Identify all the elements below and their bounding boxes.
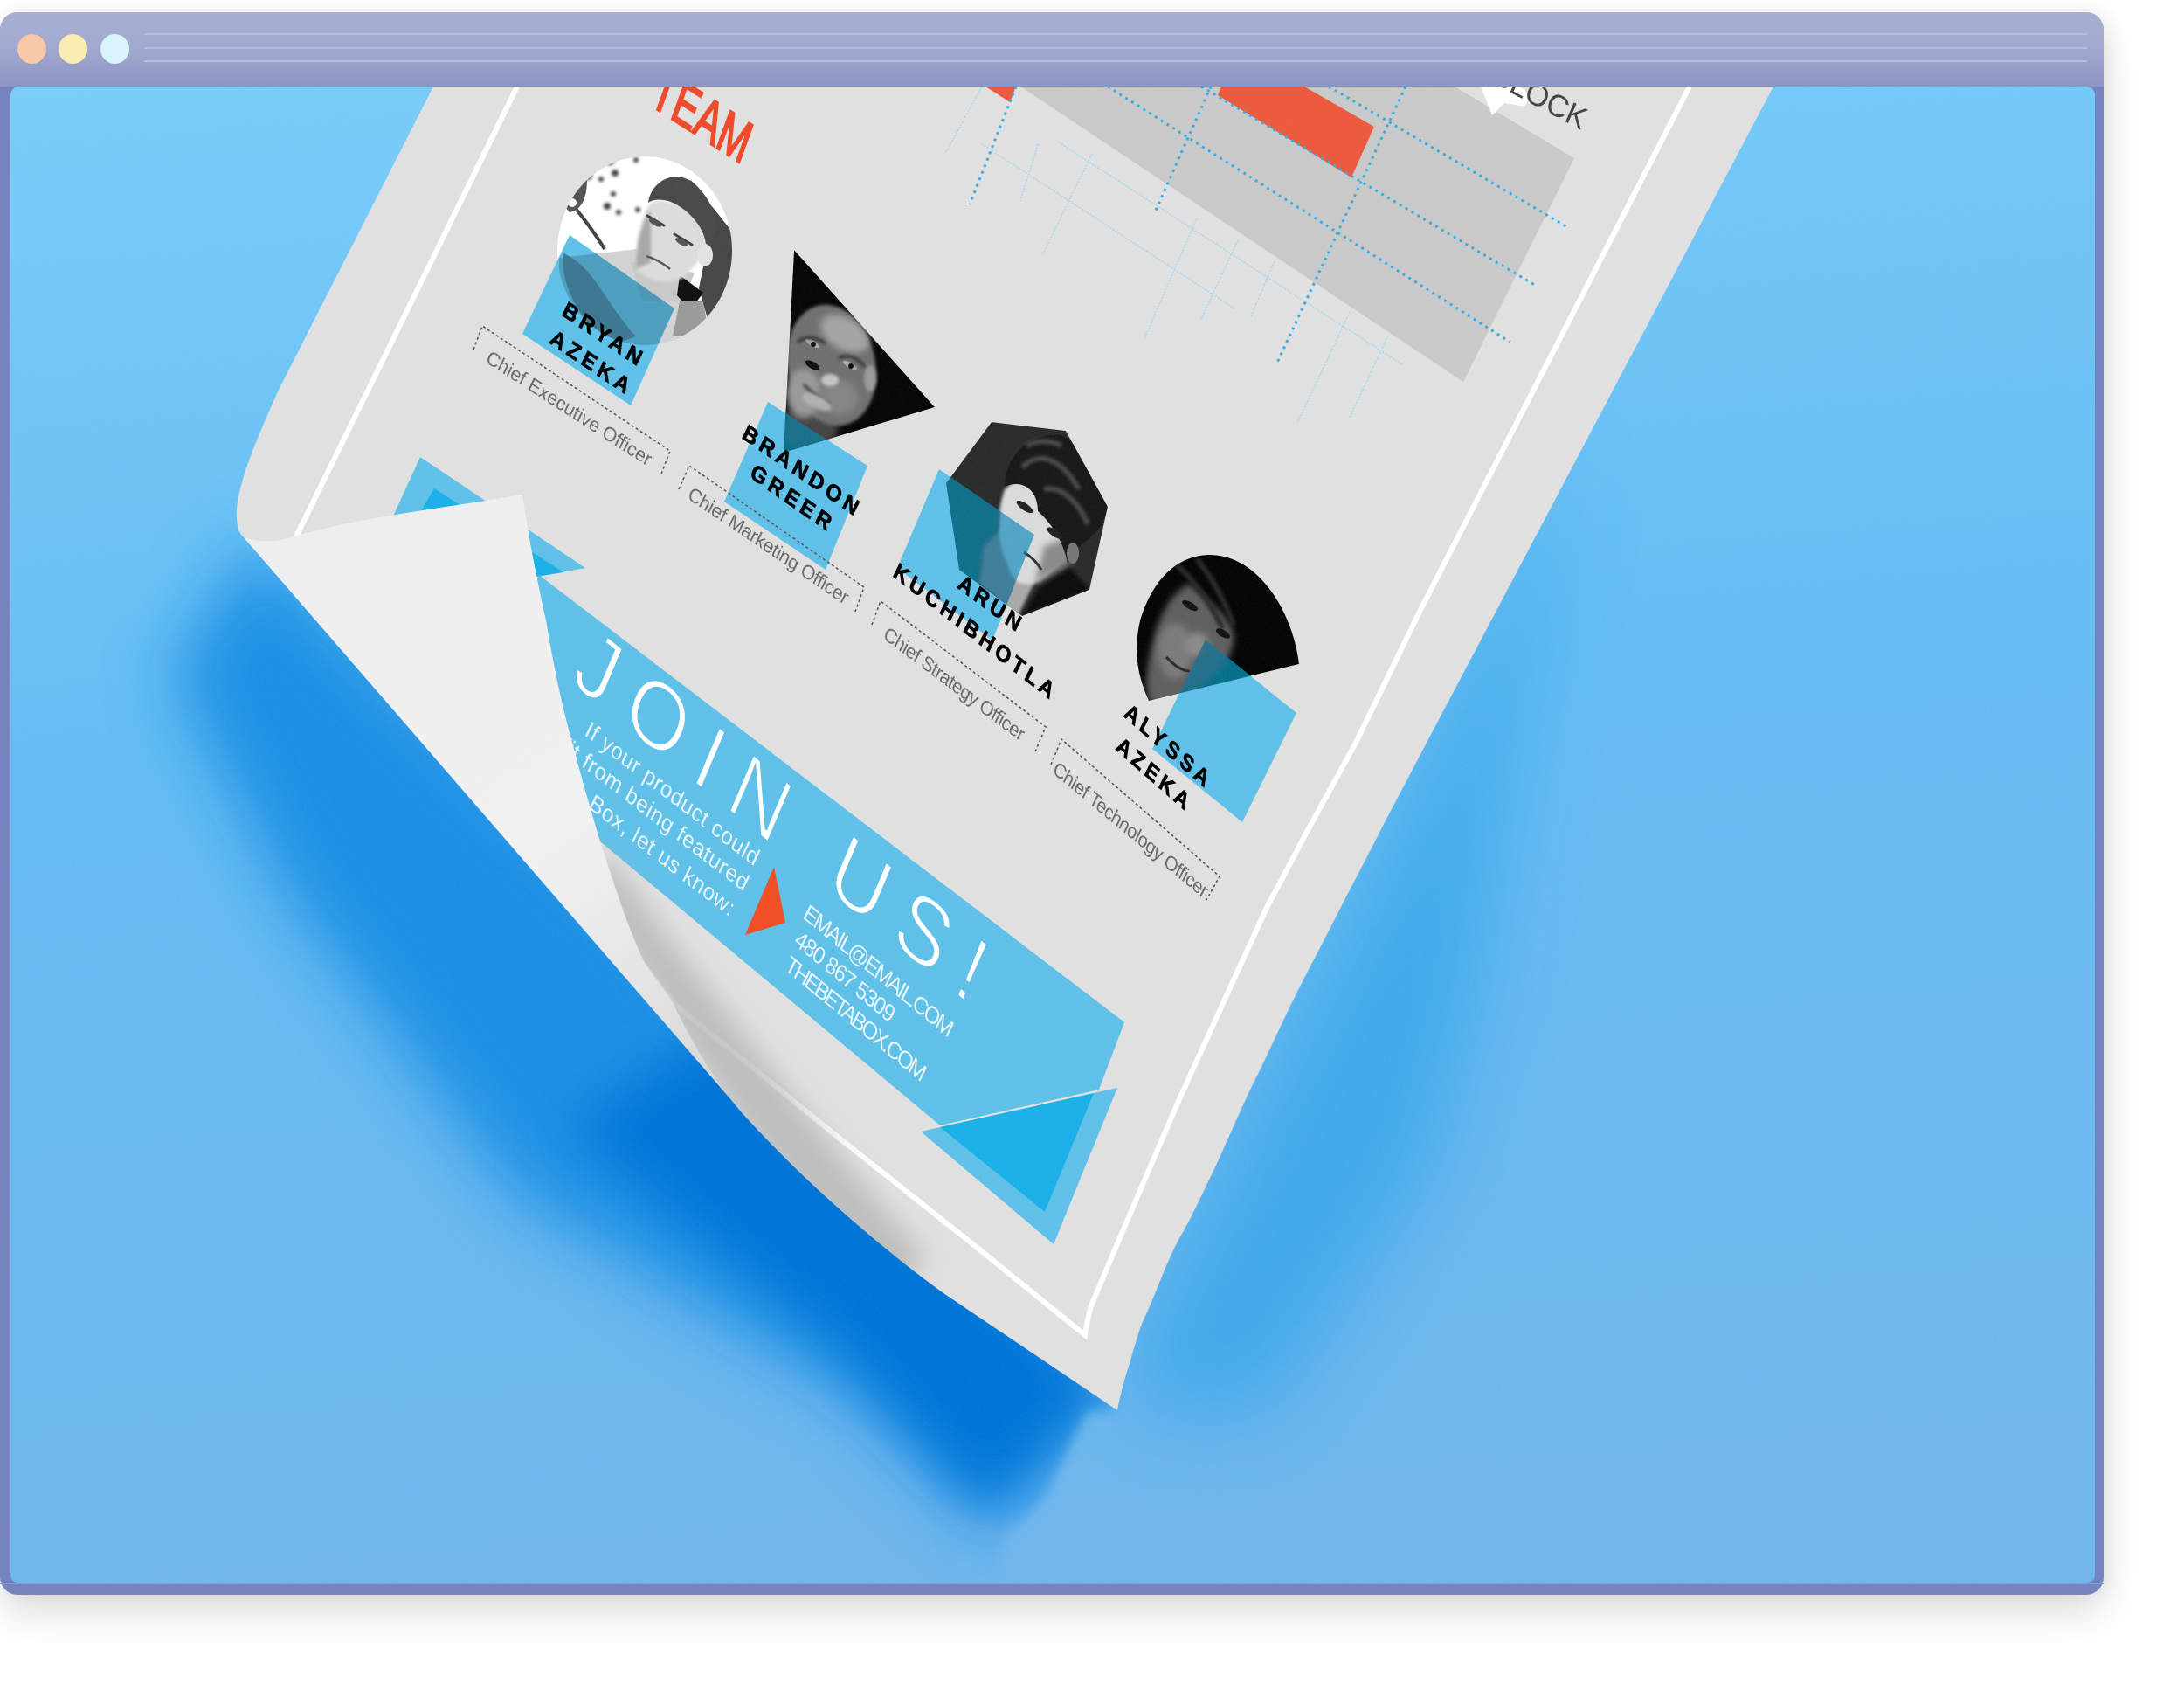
name	[546, 297, 650, 401]
title bar line 3	[144, 60, 2087, 62]
minimize button	[59, 34, 87, 64]
role box	[1051, 739, 1220, 900]
name: BRANDON	[739, 420, 866, 523]
timeline red bars	[985, 87, 1374, 177]
role: Chief Strategy Officer	[881, 622, 1028, 745]
blue square	[1152, 640, 1296, 822]
curl shadow on poster	[594, 848, 926, 1293]
name: GREER	[747, 460, 839, 538]
heading: TEAM: TEAM	[644, 55, 760, 176]
team member: Bryan Azeka	[473, 156, 736, 476]
role box	[473, 326, 670, 476]
team member: Arun Kuchibhotla	[872, 422, 1108, 751]
name: BRYAN	[558, 297, 650, 373]
title bar	[0, 12, 2104, 87]
top inner triangle	[367, 488, 563, 603]
name: KUCHIBHOTLA	[889, 558, 1061, 707]
role: Chief Executive Officer	[483, 346, 655, 470]
role box	[872, 601, 1046, 751]
shadows under poster	[170, 542, 1117, 1529]
close button	[17, 34, 46, 64]
bottom window rim	[0, 1583, 2104, 1584]
team member: Alyssa Azeka	[1050, 555, 1299, 903]
top triangle	[349, 457, 585, 612]
white speech shape	[1481, 87, 1531, 115]
label: BLOCK: BLOCK	[1487, 57, 1592, 136]
deep shadow near corner	[568, 1022, 1109, 1512]
maximize button	[100, 34, 129, 64]
contact details	[781, 898, 957, 1088]
blue square	[897, 469, 1034, 640]
role: Chief Technology Officer	[1050, 757, 1212, 903]
dotted timeline grid	[970, 87, 1569, 364]
contact details: EMAIL@EMAIL.COM	[799, 898, 957, 1043]
invitation text: on The Beta Box, let us know:	[478, 705, 740, 922]
contact details: 480 867 5309	[791, 924, 899, 1028]
banner band	[489, 575, 1124, 1125]
pale grid lines	[946, 87, 1402, 423]
name: ALYSSA	[1121, 699, 1216, 795]
soft shadow right of poster	[1132, 437, 1572, 1416]
blue square	[522, 235, 674, 405]
team member: Brandon Greer	[679, 250, 935, 612]
large shadow	[170, 542, 1117, 1529]
bottom triangle	[921, 1088, 1117, 1244]
blue square	[724, 402, 867, 570]
invitation text: If your product could	[581, 716, 764, 871]
name: ARUN	[954, 570, 1028, 639]
white inner border	[296, 87, 1690, 1335]
join-us banner	[349, 457, 1124, 1244]
name: AZEKA	[546, 325, 638, 401]
heading: JOIN US!: JOIN US!	[562, 607, 1001, 1023]
curled page corner	[244, 495, 750, 1122]
role box	[679, 466, 864, 612]
invitation text: benefit from being featured	[516, 699, 754, 896]
title bar line 2	[144, 47, 2087, 49]
role: Chief Marketing Officer	[685, 482, 853, 609]
red arrow triangle	[745, 867, 785, 935]
title bar line 1	[144, 33, 2087, 35]
bottom inner triangle	[940, 1093, 1094, 1212]
grey timeline block	[1020, 87, 1574, 382]
contact details: THEBETABOX.COM	[781, 950, 930, 1088]
poster sheet	[237, 87, 1773, 1410]
name: AZEKA	[1113, 732, 1196, 818]
